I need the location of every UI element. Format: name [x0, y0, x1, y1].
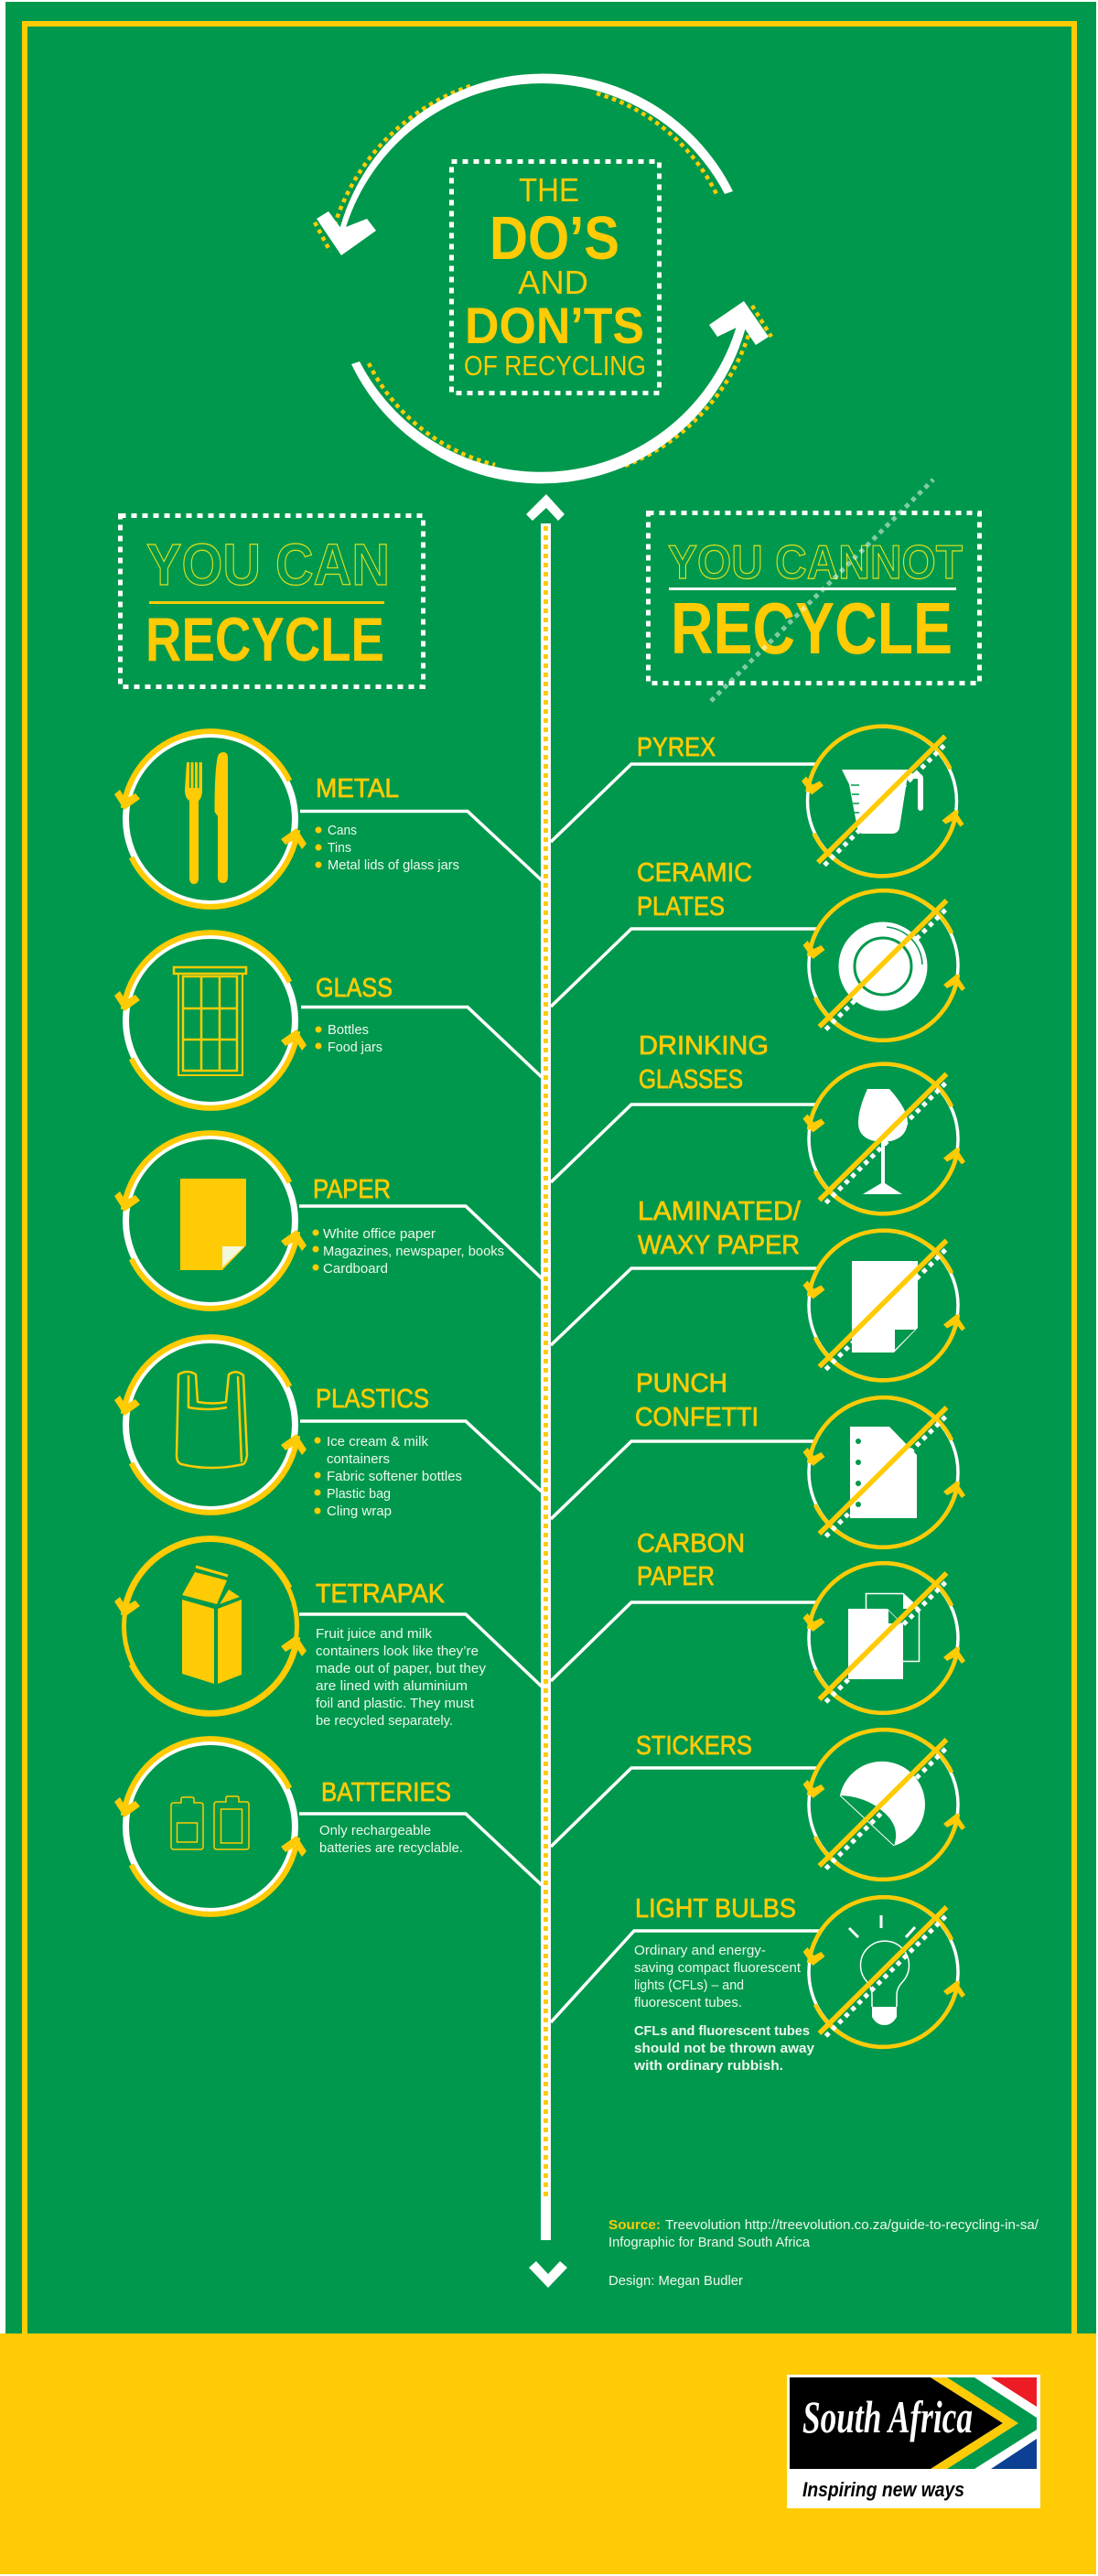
top white edge: [0, 0, 1098, 2]
bottom white edge: [0, 2574, 1098, 2576]
heading: drinking glasses: DRINKING: [639, 1031, 769, 1061]
central timeline: [526, 494, 567, 2288]
panel: you cannot recycle: [648, 480, 979, 701]
heading: pyrex: PYREX: [637, 733, 716, 762]
heading: punch confetti: [635, 1369, 759, 1432]
left white edge: [0, 0, 5, 2333]
heading: drinking glasses: GLASSES: [639, 1065, 743, 1094]
list: plastics items: containers: [327, 1451, 390, 1467]
text: tetrapak description: containers look like they’re: [316, 1644, 479, 1659]
icon: milk carton: [182, 1567, 242, 1684]
list: metal items: Tins: [328, 840, 351, 856]
list: paper items: Cardboard: [323, 1261, 388, 1277]
item: drinking glasses: [639, 1031, 965, 1213]
icon: batteries: [171, 1796, 249, 1849]
panel: you can recycle: YOU CAN: [146, 532, 390, 598]
heading: light bulbs: LIGHT BULBS: [635, 1894, 796, 1924]
title block: OF RECYCLING: [464, 350, 646, 382]
heading: carbon paper: CARBON: [637, 1529, 745, 1558]
heading: ceramic plates: PLATES: [637, 892, 725, 922]
item: tetrapak: [114, 1538, 486, 1729]
text: light bulbs description: Ordinary and energy-: [634, 1943, 766, 1958]
icon: light bulb: [849, 1915, 915, 2025]
text: tetrapak description: [316, 1626, 486, 1729]
item: carbon paper: [637, 1529, 965, 1713]
list: metal items: [315, 823, 459, 873]
item: metal: [114, 731, 459, 907]
list: plastics items: Fabric softener bottles: [327, 1469, 462, 1484]
text: light bulbs description: lights (CFLs) – and: [634, 1978, 744, 1993]
source and credits: [608, 2217, 1039, 2289]
text: light bulbs description: fluorescent tubes.: [634, 1995, 742, 2010]
heading: ceramic plates: CERAMIC: [637, 858, 752, 888]
text: tetrapak description: be recycled separately.: [316, 1713, 453, 1729]
text: batteries description: [319, 1823, 463, 1856]
icon: plastic bag: [177, 1372, 247, 1468]
list: plastics items: Ice cream & milk: [327, 1434, 428, 1450]
item: light bulbs: [633, 1894, 965, 2074]
text: batteries description: batteries are recyclable.: [319, 1840, 463, 1856]
panel: you cannot recycle: RECYCLE: [671, 587, 953, 669]
item: punch confetti: [635, 1369, 965, 1547]
item: plastics: [114, 1337, 462, 1519]
logo: Brand South Africa: South Africa: [802, 2391, 973, 2442]
heading: carbon paper: PAPER: [637, 1562, 715, 1591]
heading: glass: GLASS: [316, 974, 393, 1003]
item: stickers: [636, 1730, 965, 1880]
heading: punch confetti: PUNCH: [636, 1369, 727, 1398]
list: glass items: [315, 1022, 382, 1055]
text: tetrapak description: are lined with aluminium: [316, 1678, 468, 1694]
text: light bulbs description: with ordinary rubbish.: [633, 2058, 783, 2074]
list: plastics items: [315, 1434, 462, 1519]
source and credits: Treevolution http://treevolution.co.za/guide-to-recycling-in-sa/: [665, 2217, 1039, 2233]
item: pyrex: [637, 727, 964, 876]
heading: metal: METAL: [316, 774, 399, 803]
connector lines: [299, 764, 822, 2022]
item: paper: [114, 1133, 504, 1309]
icon: wine glass: [858, 1089, 908, 1194]
list: paper items: [313, 1226, 504, 1277]
list: metal items: Cans: [328, 823, 357, 838]
heading: laminated waxy paper: LAMINATED/: [638, 1197, 801, 1226]
icon: measuring jug: [842, 770, 920, 834]
heading: plastics: PLASTICS: [316, 1385, 429, 1414]
text: batteries description: Only rechargeable: [319, 1823, 431, 1838]
heading: laminated waxy paper: WAXY PAPER: [638, 1231, 800, 1260]
list: paper items: Magazines, newspaper, books: [323, 1244, 504, 1259]
text: tetrapak description: foil and plastic. They must: [316, 1696, 475, 1711]
icon: sticker: [840, 1762, 925, 1846]
item: glass: [114, 932, 393, 1108]
list: glass items: Food jars: [328, 1040, 382, 1055]
source and credits: Infographic for Brand South Africa: [608, 2235, 811, 2250]
list: paper items: White office paper: [323, 1226, 436, 1242]
heading: laminated waxy paper: [638, 1197, 801, 1260]
heading: ceramic plates: [637, 858, 752, 922]
heading: punch confetti: CONFETTI: [635, 1403, 759, 1432]
text: light bulbs description: saving compact fluorescent: [634, 1960, 802, 1976]
heading: batteries: BATTERIES: [321, 1778, 451, 1807]
heading: tetrapak: TETRAPAK: [316, 1579, 445, 1609]
logo: Brand South Africa: Inspiring new ways: [802, 2478, 964, 2501]
panel: you can recycle: RECYCLE: [145, 605, 384, 674]
right white edge: [1096, 0, 1098, 2576]
title block: THE: [519, 171, 579, 209]
icon: fork and knife: [185, 752, 228, 884]
title block: DO’S: [490, 204, 619, 273]
title block: AND: [518, 264, 588, 301]
source and credits: Source:: [608, 2217, 661, 2233]
text: light bulbs description: should not be thrown away: [634, 2041, 815, 2056]
heading: stickers: STICKERS: [636, 1731, 752, 1761]
recycling cycle arrows: [315, 73, 771, 483]
yellow footer band: [0, 2333, 1096, 2574]
logo: Brand South Africa: [787, 2375, 1040, 2508]
source and credits: Design: Megan Budler: [608, 2273, 743, 2289]
heading: carbon paper: [637, 1529, 745, 1591]
item: laminated paper: [638, 1197, 965, 1380]
icon: carbon sheets: [848, 1593, 920, 1679]
list: glass items: Bottles: [328, 1022, 369, 1038]
text: tetrapak description: made out of paper, but they: [316, 1661, 486, 1676]
panel: you cannot recycle: YOU CANNOT: [668, 536, 963, 589]
text: light bulbs description: [633, 1943, 815, 2074]
icon: punched sheet: [850, 1427, 917, 1518]
title block: DON’TS: [465, 296, 644, 354]
list: plastics items: Cling wrap: [327, 1504, 392, 1519]
text: tetrapak description: Fruit juice and milk: [316, 1626, 432, 1642]
item: batteries: [114, 1739, 463, 1914]
list: plastics items: Plastic bag: [327, 1486, 391, 1502]
icon: laminated sheet: [852, 1261, 918, 1353]
item: ceramic plates: [637, 858, 965, 1040]
title block: [452, 161, 659, 393]
heading: paper: PAPER: [313, 1175, 391, 1204]
heading: drinking glasses: [639, 1031, 769, 1094]
icon: paper sheet: [180, 1179, 246, 1270]
icon: window: [174, 967, 246, 1075]
list: metal items: Metal lids of glass jars: [328, 857, 459, 873]
panel: you can recycle: [121, 516, 423, 686]
text: light bulbs description: CFLs and fluorescent tubes: [634, 2023, 810, 2039]
icon: plate: [838, 922, 928, 1010]
